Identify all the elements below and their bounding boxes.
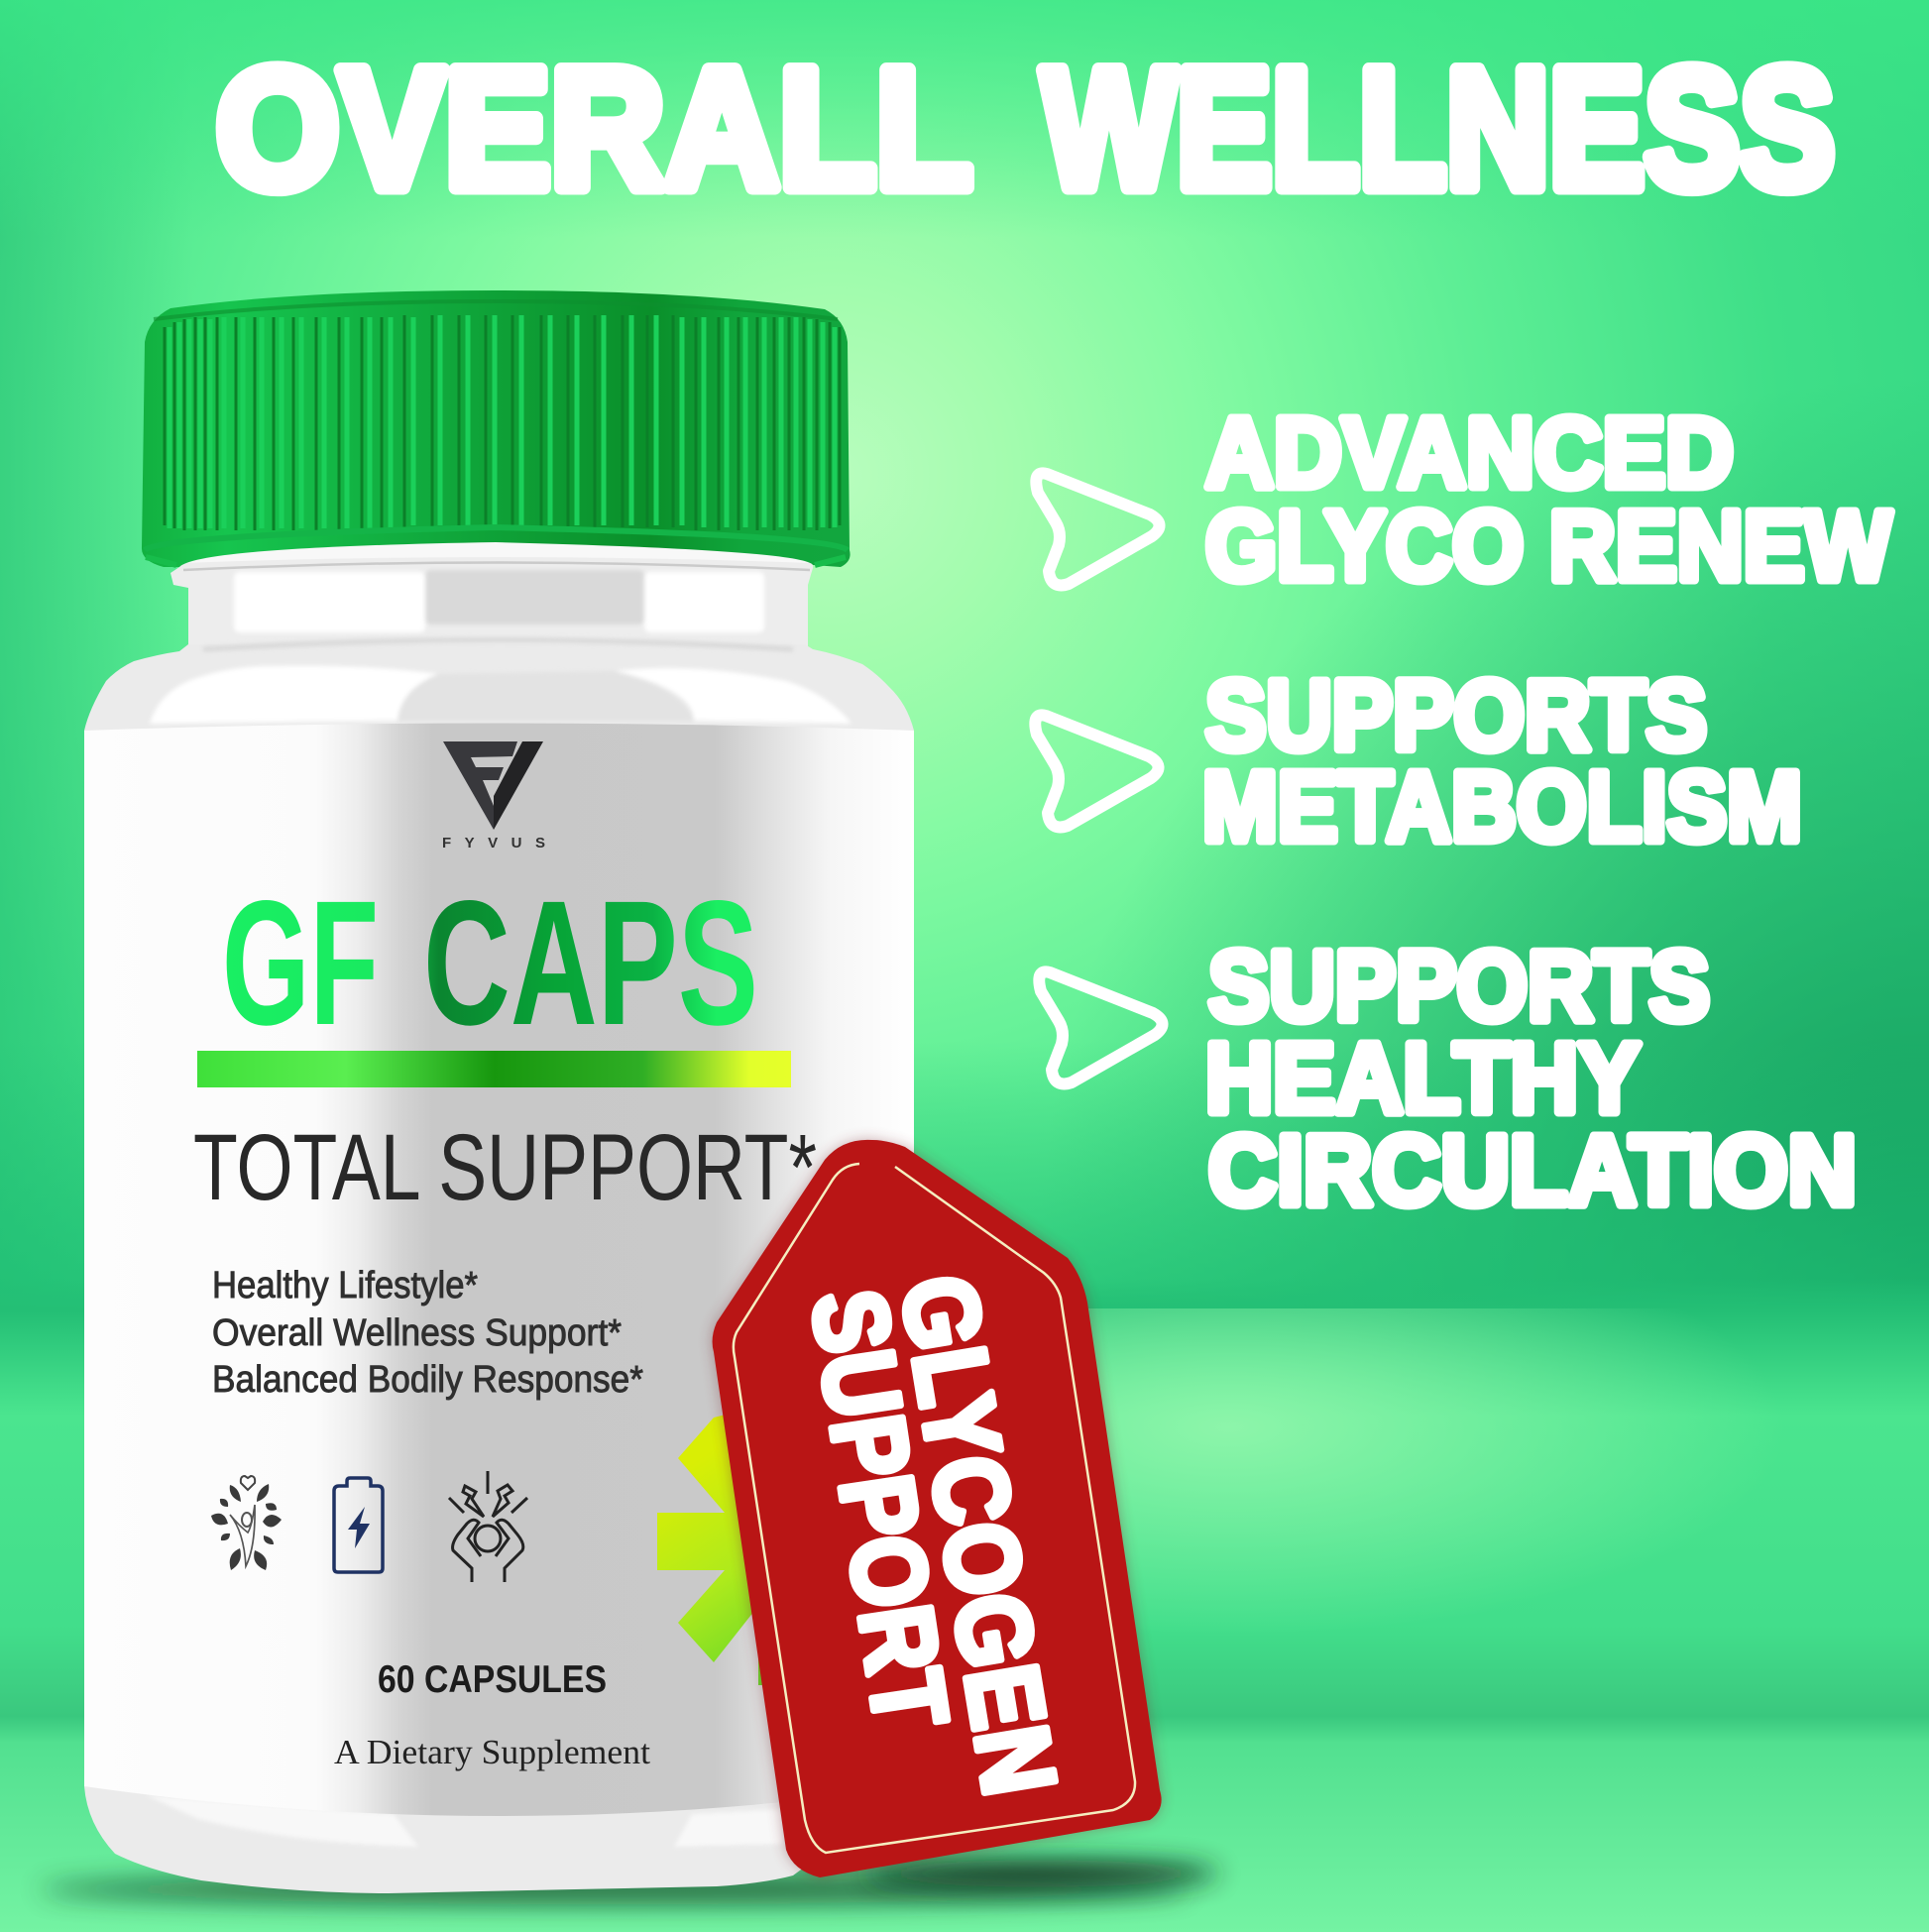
- icon: arrow: [1035, 715, 1159, 827]
- benefit text: [1205, 931, 1857, 1226]
- benefit text: CIRCULATION: [1208, 1115, 1857, 1226]
- benefits list: Balanced Bodily Response*: [212, 1359, 643, 1401]
- bottle neck: [170, 534, 813, 649]
- benefit text: SUPPORTS: [1205, 660, 1707, 771]
- benefit text: GLYCO RENEW: [1205, 491, 1892, 602]
- bottle cap: [142, 290, 851, 567]
- dietary supplement line: A Dietary Supplement: [334, 1733, 650, 1771]
- icon: arrow: [1039, 971, 1163, 1083]
- icon: arrow: [1036, 473, 1160, 585]
- subtitle: TOTAL SUPPORT*: [193, 1115, 817, 1220]
- product name: CAPS: [423, 863, 758, 1062]
- capsule count: 60 CAPSULES: [378, 1658, 607, 1701]
- floor shadow under bottle: [40, 1860, 1219, 1904]
- benefit 3: [1039, 931, 1857, 1226]
- benefit 2: [1035, 660, 1802, 862]
- benefits list: Overall Wellness Support*: [212, 1312, 622, 1354]
- benefit text: [1205, 398, 1892, 602]
- icon: hands with energy: [449, 1471, 527, 1582]
- product name: [222, 863, 758, 1062]
- tag stitching: [734, 1164, 1135, 1853]
- bottle label: [84, 724, 914, 1816]
- icon: battery: [334, 1478, 383, 1572]
- product name: GF: [222, 863, 379, 1062]
- title: OVERALL: [216, 34, 972, 224]
- product bottle: [84, 290, 914, 1893]
- benefits list: [212, 1265, 643, 1401]
- gradient bar: [197, 1051, 791, 1087]
- red tag: [713, 1140, 1162, 1877]
- brand logo: FYVUS: [442, 835, 545, 852]
- medical cross emblem: [657, 1408, 793, 1685]
- shoulder highlights: [150, 640, 851, 724]
- benefit text: METABOLISM: [1202, 751, 1802, 862]
- bottle base highlights: [146, 1795, 783, 1847]
- benefit text: [1202, 660, 1802, 862]
- bottle body: [84, 644, 914, 1893]
- tag text: [789, 1268, 1078, 1803]
- benefit text: SUPPORTS: [1208, 931, 1710, 1042]
- benefit text: ADVANCED: [1205, 398, 1734, 509]
- tag shadow: [713, 1140, 1161, 1877]
- benefits list: Healthy Lifestyle*: [212, 1265, 478, 1307]
- brand logo: [442, 741, 545, 852]
- tag text: SUPPORT: [789, 1283, 969, 1736]
- title: [216, 34, 1835, 224]
- tag text: GLYCOGEN: [878, 1268, 1078, 1803]
- benefit text: HEALTHY: [1205, 1023, 1641, 1134]
- benefit 1: [1036, 398, 1892, 602]
- icon: wellness tree: [211, 1476, 282, 1570]
